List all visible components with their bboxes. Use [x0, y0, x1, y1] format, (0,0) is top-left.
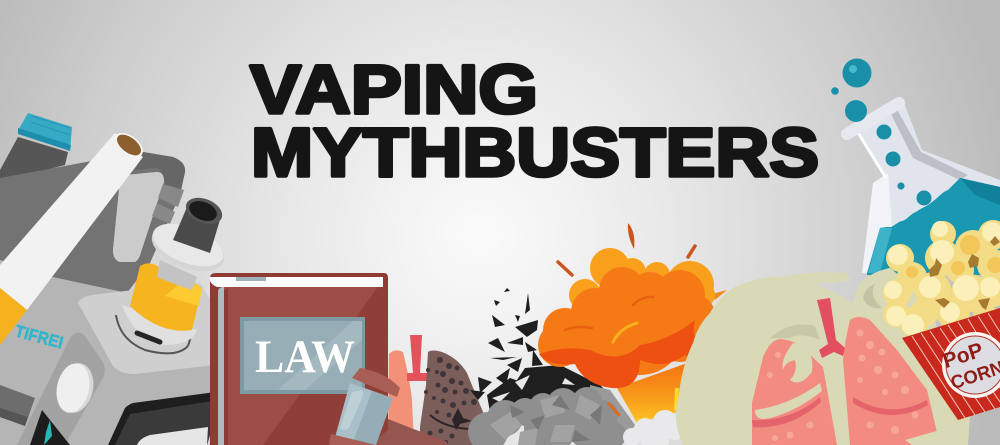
title	[250, 51, 819, 191]
carton text	[940, 339, 1000, 393]
icon: smoke shading	[863, 284, 882, 308]
swirl of smoke in lung	[782, 343, 812, 383]
red carton	[902, 308, 1000, 420]
book label	[240, 317, 365, 394]
screen	[108, 391, 223, 445]
icon: beige smoke cloud	[676, 268, 970, 445]
icon: law book	[210, 273, 388, 445]
icon: chemistry flask with bubbles	[831, 58, 1000, 275]
icon: cigarette	[0, 128, 147, 345]
icon: vape mod body	[0, 260, 240, 445]
title: MYTHBUSTERS	[251, 114, 819, 191]
icon: e-liquid jug	[0, 113, 185, 293]
sparks	[628, 223, 634, 249]
icon: atomizer tank	[116, 193, 231, 353]
button panel	[17, 332, 105, 445]
icon: pink lungs	[752, 298, 940, 445]
icon: grey smoke cloud	[468, 385, 635, 445]
brand text: TIFREI	[13, 322, 65, 353]
icon: damaged black lung	[420, 350, 485, 445]
icon: explosion	[538, 223, 727, 445]
white puff	[623, 410, 685, 445]
red lower cloud	[539, 320, 707, 388]
popcorn kernels	[883, 220, 1000, 337]
icon: lung behind gavel	[388, 335, 427, 445]
icon: popcorn box	[883, 220, 1000, 420]
title: VAPING	[250, 51, 538, 128]
carton text: PoP	[940, 339, 986, 373]
carton label	[942, 332, 1000, 398]
amber back cloud	[569, 248, 715, 311]
icon: gavel	[329, 368, 447, 445]
book title: LAW	[255, 331, 355, 383]
icon: scattered black shards	[470, 288, 610, 412]
orange main cloud	[538, 267, 715, 386]
